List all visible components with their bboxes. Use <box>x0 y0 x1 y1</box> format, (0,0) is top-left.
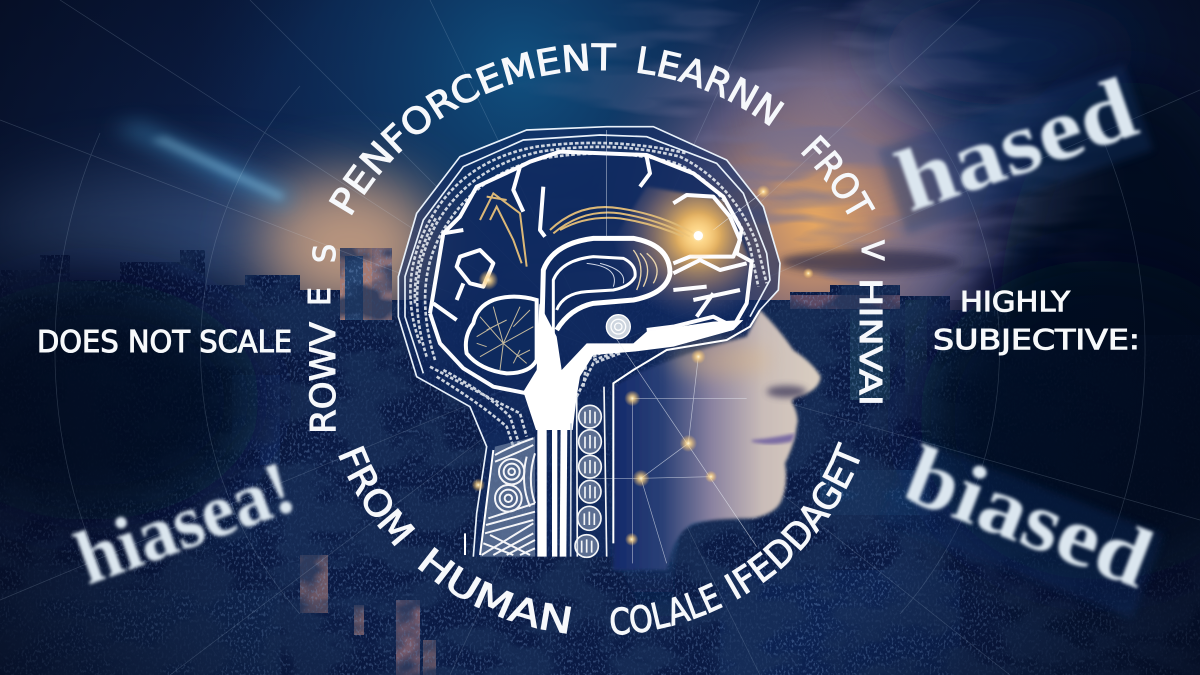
curved text: left side <box>303 244 344 434</box>
blurred word: top right: hased <box>885 59 1148 231</box>
label: highly subjective: SUBJECTIVE: <box>933 323 1140 356</box>
neck line left and throat <box>465 310 760 555</box>
cerebellum <box>466 297 537 373</box>
pituitary spiral <box>606 315 630 339</box>
head illustration <box>398 127 821 630</box>
curved text: top arc: PENFORCEMENT <box>328 43 616 216</box>
neck swirl pattern <box>480 437 535 557</box>
blurred word: bottom left: hiasea! <box>65 445 305 601</box>
background: night sky and sunset <box>0 0 1200 310</box>
curved text: bottom arc: COLALE <box>610 582 723 635</box>
brain interior fill <box>430 152 752 393</box>
spinal cord stripes <box>542 423 571 557</box>
label: highly subjective: HIGHLY <box>960 285 1071 318</box>
dotted band around brain <box>410 143 767 447</box>
curved text: right side <box>852 240 889 406</box>
curved text: bottom arc: FROM <box>338 446 416 546</box>
cheek glow <box>670 342 770 378</box>
label: highly subjective <box>933 285 1140 356</box>
glowing nodes <box>472 185 814 546</box>
label: does not scale: DOES NOT SCALE <box>37 325 292 360</box>
curved text: top arc: LEARNN <box>637 46 784 126</box>
face <box>613 310 821 570</box>
curved text: left side: S <box>308 244 343 263</box>
curved text: bottom arc <box>338 441 860 635</box>
curved text: right side: HINVAI <box>852 278 887 406</box>
vertebrae column <box>575 387 607 557</box>
curved text: right side: V <box>854 240 889 261</box>
outer head outline <box>398 127 780 557</box>
neck fill <box>613 497 713 630</box>
curved text: top arc <box>328 43 876 216</box>
curved text: top arc: FROT <box>801 134 876 215</box>
curved text: bottom arc: IFEDDAGET <box>724 441 860 600</box>
curved text: left side: E <box>303 287 338 306</box>
constellation lines <box>587 130 763 563</box>
blurred word: bottom right: biased <box>893 428 1165 606</box>
mouth <box>752 433 795 444</box>
curved text: left side: ROWV <box>304 322 344 434</box>
nose shadow <box>767 386 807 398</box>
head silhouette fill <box>398 127 780 557</box>
gold nerve arcs <box>480 193 697 267</box>
curved text: bottom arc: HUMAN <box>418 547 572 634</box>
golden glow in front lobe <box>613 187 750 337</box>
white brainstem mass <box>523 303 743 430</box>
brain outline <box>430 152 752 393</box>
curved white duct <box>539 238 670 430</box>
